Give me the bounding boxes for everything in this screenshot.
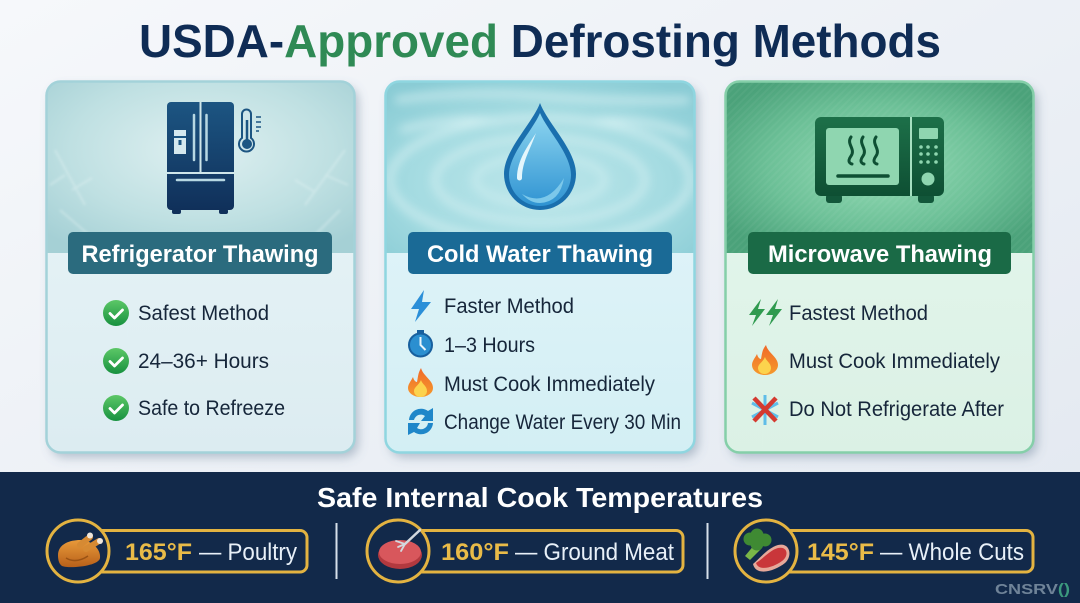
item: time: 1–3 Hours [444,334,535,357]
icon: refrigerator [167,102,261,214]
item: fastest method [749,299,928,326]
item: faster method: Faster Method [444,295,574,318]
heading: safe internal cook temperatures: Safe Internal Cook Temperatures [317,482,763,513]
badge: cold water thawing: Cold Water Thawing [427,241,653,268]
icon: water drop [504,103,576,210]
title: USDA-Approved Defrosting Methods [139,15,941,67]
logo: CNSRV: CNSRV () [995,581,1070,598]
item: change water: Change Water Every 30 Min [444,411,681,434]
icon: patty with fork [378,530,422,569]
item: refreeze [103,395,285,421]
badge: refrigerator thawing: Refrigerator Thawing [82,241,318,268]
list: cold water details [408,290,681,435]
icon: microwave [815,117,944,203]
temperature: whole cuts: 145°F [807,539,874,566]
item: must cook: Must Cook Immediately [789,350,1000,373]
badge: refrigerator thawing [68,232,332,274]
temperature: poultry [47,520,307,582]
item: time [409,330,535,357]
badge: cold water thawing [408,232,672,274]
item: safest method: Safest Method [138,302,269,325]
temperature: poultry: — Poultry [199,539,297,566]
badge: microwave thawing [748,232,1011,274]
temperature: whole cuts [735,520,1033,582]
panel: safe internal cook temperatures [0,472,1080,603]
item: change water [408,408,681,435]
panel: microwave thawing [725,81,1035,452]
item: duration [103,348,269,374]
item: must cook: Must Cook Immediately [444,373,655,396]
temperature: whole cuts: — Whole Cuts [880,539,1024,566]
item: must cook [752,345,1000,375]
list: refrigerator benefits [103,300,285,421]
temperature: ground meat [367,520,683,582]
temperature: poultry: 165°F [125,539,192,566]
item: do not refrigerate: Do Not Refrigerate After [789,398,1004,421]
item: safest method [103,300,269,326]
panel: cold water thawing [385,81,695,452]
item: fastest method: Fastest Method [789,302,928,325]
temperature: ground meat: — Ground Meat [515,539,674,566]
item: duration: 24–36+ Hours [138,350,269,373]
panel: refrigerator thawing [46,81,355,452]
list: microwave details [749,299,1004,425]
temperature: ground meat: 160°F [441,539,509,566]
item: must cook [408,368,655,397]
item: refreeze: Safe to Refreeze [138,397,285,420]
item: faster method [411,290,574,322]
icon: roast chicken [58,532,103,567]
item: do not refrigerate [752,395,1004,425]
badge: microwave thawing: Microwave Thawing [768,241,992,268]
icon: broccoli and steak [744,528,789,572]
